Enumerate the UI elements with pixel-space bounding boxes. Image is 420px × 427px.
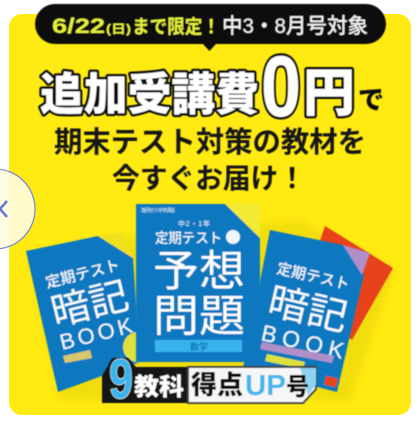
heading: deliver now line: 今すぐお届け！ bbox=[112, 163, 306, 194]
book: center exam workbook: 定期テスト bbox=[155, 230, 222, 246]
carousel arrow button bbox=[0, 169, 35, 249]
book: left vocabulary book bbox=[26, 232, 153, 392]
badge: nine subjects, score up: 9 bbox=[109, 347, 133, 410]
heading: additional fee zero yen: 0 bbox=[261, 39, 301, 135]
book: center exam workbook bbox=[136, 204, 260, 362]
callout: deadline pill: 6/22 bbox=[52, 15, 105, 38]
badge: nine subjects, score up bbox=[102, 347, 316, 410]
badge: nine subjects, score up: 教科 bbox=[134, 374, 184, 401]
book: right vocabulary book bbox=[243, 230, 370, 392]
callout: deadline pill: 中3・8月号対象 bbox=[222, 15, 368, 38]
book: center exam workbook: 問題 bbox=[153, 292, 245, 341]
book: center exam workbook: 予想 bbox=[153, 248, 245, 296]
badge: nine subjects, score up: 得点 bbox=[191, 370, 243, 400]
book: left vocabulary book: BOOK bbox=[57, 313, 135, 355]
book: right vocabulary book: 暗記 bbox=[264, 281, 351, 340]
heading: additional fee zero yen: で bbox=[358, 85, 384, 115]
badge: nine subjects, score up: 号 bbox=[286, 374, 309, 401]
book: left vocabulary book: 暗記 bbox=[47, 275, 133, 335]
book: center exam workbook: 数学 bbox=[190, 341, 208, 352]
callout: deadline pill: (日) bbox=[106, 22, 131, 36]
callout: deadline pill bbox=[35, 4, 386, 51]
book: center exam workbook: 進研ゼミ 中学講座 bbox=[141, 207, 175, 214]
badge: nine subjects, score up: UP bbox=[245, 370, 286, 402]
book: right vocabulary book: BOOK bbox=[259, 320, 347, 364]
book: center exam workbook: 中2・1年 bbox=[178, 219, 210, 228]
red card bbox=[300, 226, 393, 340]
heading: additional fee zero yen: 円 bbox=[303, 65, 355, 123]
heading: additional fee zero yen: 追加受講費 bbox=[40, 69, 259, 120]
book: right vocabulary book: 定期テスト bbox=[275, 260, 351, 294]
heading: study materials line: 期末テスト対策の教材を bbox=[54, 126, 366, 159]
heading: additional fee zero yen bbox=[40, 39, 384, 135]
book shadow bbox=[30, 220, 395, 400]
callout: deadline pill: まで限定！ bbox=[132, 16, 220, 38]
book: left vocabulary book: 定期テスト bbox=[44, 257, 122, 292]
